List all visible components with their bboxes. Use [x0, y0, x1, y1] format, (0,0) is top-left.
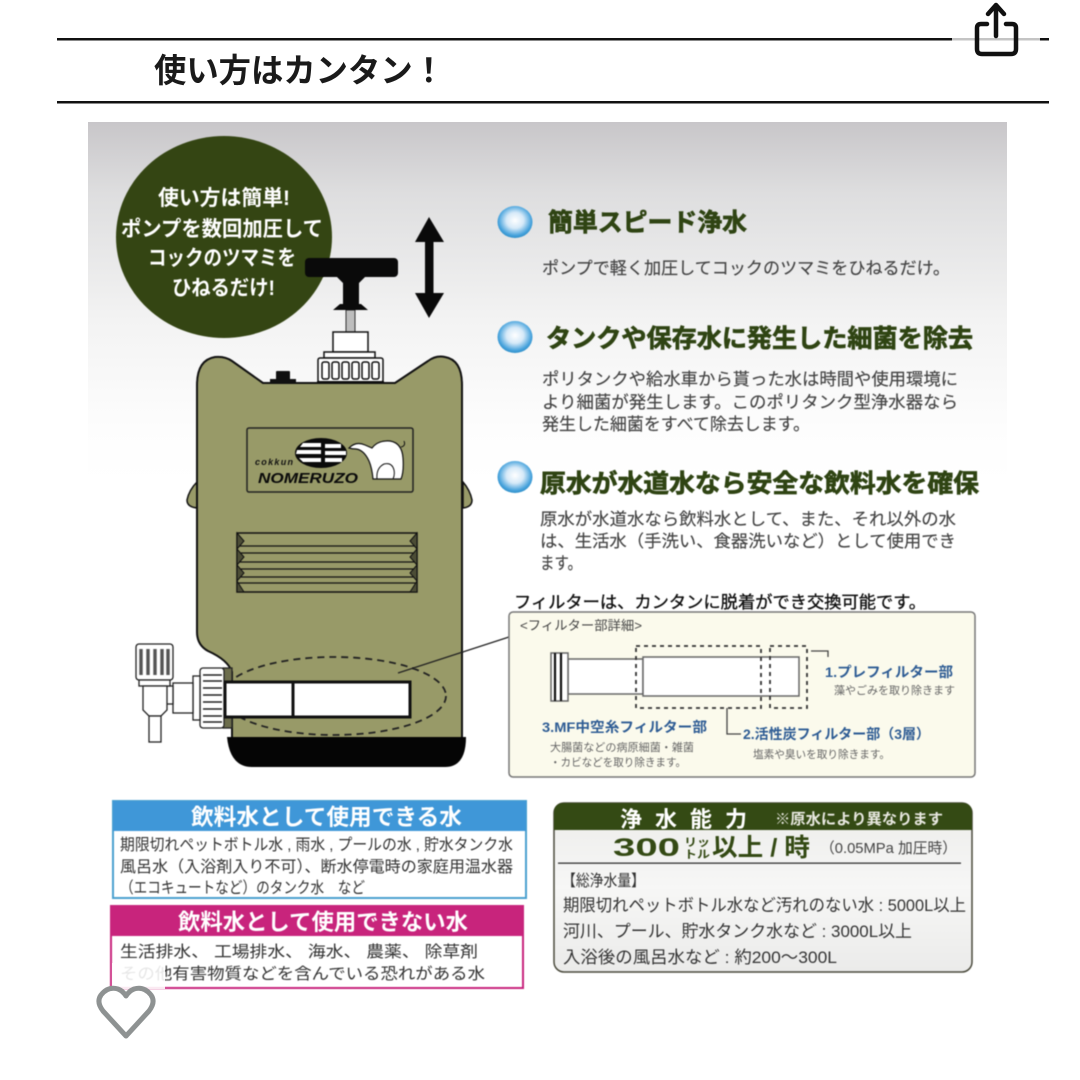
feature: simple speedy purification — [498, 206, 950, 278]
panel: unusable water: 生活排水、 工場排水、 海水、 農薬、 除草剤 — [120, 943, 478, 961]
dashed ellipse — [222, 657, 446, 735]
callout: how to use circle — [116, 136, 332, 338]
illustration: water tank — [136, 258, 472, 767]
icon: bubble — [498, 461, 532, 493]
capacity figure: 300 — [613, 834, 680, 862]
panel: filter detail: 3.MF中空糸フィルター部 — [542, 719, 707, 735]
panel: usable water: 風呂水（入浴剤入り不可）、断水停電時の家庭用温水器 — [120, 858, 513, 876]
callout: how to use circle: コックのツマミを — [148, 247, 296, 270]
panel: filter detail: <フィルター部詳細> — [520, 618, 642, 633]
feature: safe drinking water: 原水が水道水なら飲料水として、また、それ以外の水 — [540, 510, 956, 529]
leader line to filter detail — [398, 637, 509, 673]
panel: purification capacity: 浄 水 能 力 — [620, 807, 747, 832]
panel: purification capacity: （0.05MPa 加圧時） — [820, 840, 957, 857]
feature: removes bacteria: ポリタンクや給水車から貰った水は時間や使用環境に — [542, 369, 958, 389]
tank side tabs — [187, 482, 472, 508]
callout: how to use circle: ひねるだけ! — [172, 277, 275, 300]
feature: safe drinking water — [498, 461, 979, 573]
panel: product background — [88, 122, 1007, 482]
panel: filter detail: 藻やごみを取り除きます — [834, 683, 955, 697]
panel: purification capacity: 入浴後の風呂水など : 約200〜300L — [563, 948, 837, 967]
capacity figure: 以上 / 時 — [712, 834, 810, 862]
faucet — [136, 644, 232, 742]
logo plate: cokkun — [255, 457, 294, 467]
panel: usable water: （エコキュートなど）のタンク水 など — [120, 879, 365, 897]
title: 使い方はカンタン！ — [154, 52, 445, 89]
overlay behind heart — [112, 963, 165, 989]
panel: unusable water: 飲料水として使用できない水 — [178, 910, 468, 935]
feature: removes bacteria — [498, 321, 973, 434]
arrow: pump up and down — [415, 217, 444, 318]
panel: purification capacity: 期限切れペットボトル水など汚れのない水 : 5000L以上 — [563, 896, 966, 915]
feature: removes bacteria: より細菌が発生します。このポリタンク型浄水器なら — [542, 393, 958, 412]
panel: filter detail: 1.プレフィルター部 — [825, 664, 953, 680]
panel: purification capacity — [554, 803, 972, 972]
filter cartridge — [225, 682, 410, 717]
base — [227, 737, 466, 767]
capacity figure — [613, 834, 810, 862]
pump — [270, 258, 398, 384]
panel: usable water — [113, 801, 526, 898]
logo plate — [247, 428, 413, 492]
icon: share — [977, 5, 1016, 54]
panel: purification capacity: ※原水により異なります — [775, 811, 943, 828]
panel: unusable water — [111, 906, 523, 988]
panel: filter detail: 大腸菌などの病原細菌・雑菌 — [550, 740, 694, 754]
panel: purification capacity: 河川、プール、貯水タンク水など : 3000L以上 — [563, 922, 912, 941]
panel: unusable water: その他有害物質などを含んでいる恐れがある水 — [120, 965, 485, 983]
panel: usable water: 期限切れペットボトル水 , 雨水 , プールの水 , 貯水タンク水 — [120, 836, 513, 854]
filter caption: フィルターは、カンタンに脱着ができ交換可能です。 — [514, 593, 926, 612]
feature: safe drinking water: は、生活水（手洗い、食器洗いなど）として使用でき — [540, 531, 956, 551]
logo plate: NOMERUZO — [258, 470, 358, 487]
tank body — [197, 356, 462, 738]
feature: simple speedy purification: ポンプで軽く加圧してコックのツマミをひねるだけ。 — [542, 259, 950, 278]
callout: how to use circle: ポンプを数回加圧して — [121, 218, 323, 241]
panel: filter detail — [509, 612, 975, 777]
feature: removes bacteria: タンクや保存水に発生した細菌を除去 — [546, 325, 973, 353]
icon: bubble — [498, 206, 532, 238]
filter diagram — [551, 646, 828, 734]
panel: purification capacity: 【総浄水量】 — [562, 872, 645, 890]
feature: removes bacteria: 発生した細菌をすべて除去します。 — [542, 415, 810, 434]
callout: how to use circle: 使い方は簡単! — [158, 187, 290, 210]
ventilation louver — [237, 533, 417, 592]
panel: filter detail: 塩素や臭いを取り除きます。 — [753, 747, 890, 761]
panel: usable water: 飲料水として使用できる水 — [191, 805, 462, 830]
capacity figure: トル — [684, 849, 710, 861]
feature: safe drinking water: ます。 — [540, 554, 582, 573]
capacity figure: リッ — [684, 837, 710, 849]
panel: filter detail: ・カビなどを取り除きます。 — [550, 755, 686, 769]
icon: heart — [99, 988, 153, 1036]
panel: filter detail: 2.活性炭フィルター部（3層） — [743, 726, 930, 742]
feature: safe drinking water: 原水が水道水なら安全な飲料水を確保 — [540, 469, 979, 498]
icon: bubble — [498, 321, 532, 353]
feature: simple speedy purification: 簡単スピード浄水 — [548, 209, 747, 237]
